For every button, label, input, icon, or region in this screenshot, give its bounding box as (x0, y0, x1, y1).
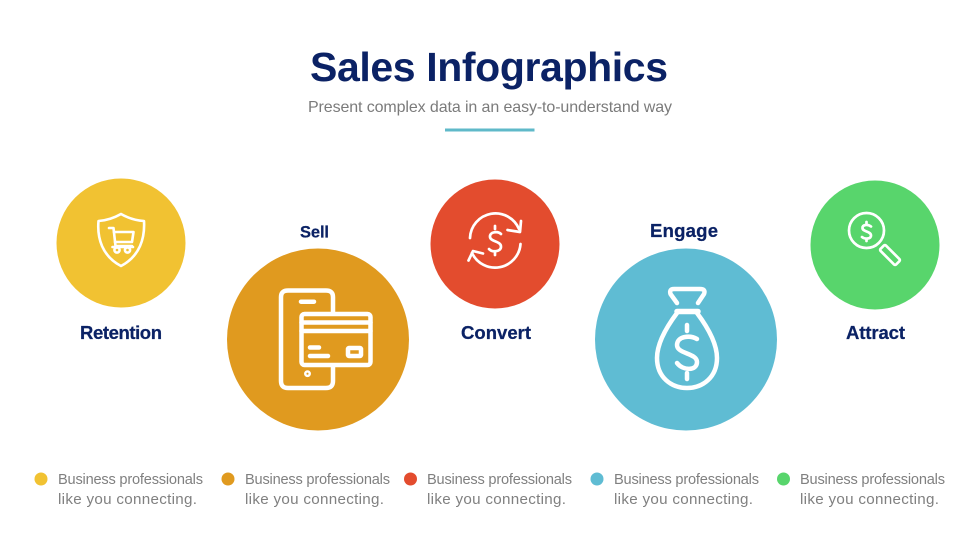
legend text: Business professionals (800, 472, 945, 488)
legend text: like you connecting. (245, 491, 384, 508)
accent underline (445, 128, 534, 132)
legend text: like you connecting. (800, 491, 939, 508)
legend item: convert (404, 472, 572, 508)
subtitle: Present complex data in an easy-to-understand way (308, 99, 672, 116)
legend text: Business professionals (614, 472, 759, 488)
title: Sales Infographics (310, 44, 668, 90)
legend text: Business professionals (427, 472, 572, 488)
label: convert: Convert (461, 322, 531, 343)
label: sell: Sell (300, 224, 329, 242)
legend text: like you connecting. (58, 491, 197, 508)
bullet (777, 472, 790, 486)
panel: retention (56, 178, 186, 343)
bullet (222, 472, 234, 486)
legend item: retention (34, 472, 203, 508)
bullet (590, 472, 604, 486)
label: retention: Retention (80, 322, 162, 343)
bullet (404, 472, 417, 486)
panel: engage (595, 220, 777, 430)
circle: retention (56, 178, 186, 308)
icon: magnifier with dollar (849, 213, 900, 265)
label: attract: Attract (846, 322, 905, 343)
icon: circular arrows with dollar (468, 213, 521, 268)
label: engage: Engage (650, 220, 718, 241)
legend item: sell (222, 472, 390, 508)
icon: shield with shopping cart (98, 214, 144, 266)
panel: attract (810, 180, 940, 343)
circle: convert (430, 180, 560, 308)
bullet (34, 472, 48, 486)
legend item: attract (777, 472, 945, 508)
legend text: like you connecting. (614, 491, 753, 508)
icon: money bag (657, 289, 717, 388)
circle: attract (810, 180, 940, 310)
legend item: engage (590, 472, 759, 508)
panel: convert (430, 180, 560, 343)
panel: sell (227, 224, 409, 430)
legend text: Business professionals (58, 472, 203, 488)
legend text: Business professionals (245, 472, 390, 488)
legend text: like you connecting. (427, 491, 566, 508)
icon: phone and credit card (281, 290, 370, 388)
circle: sell (227, 248, 409, 430)
circle: engage (595, 248, 777, 430)
